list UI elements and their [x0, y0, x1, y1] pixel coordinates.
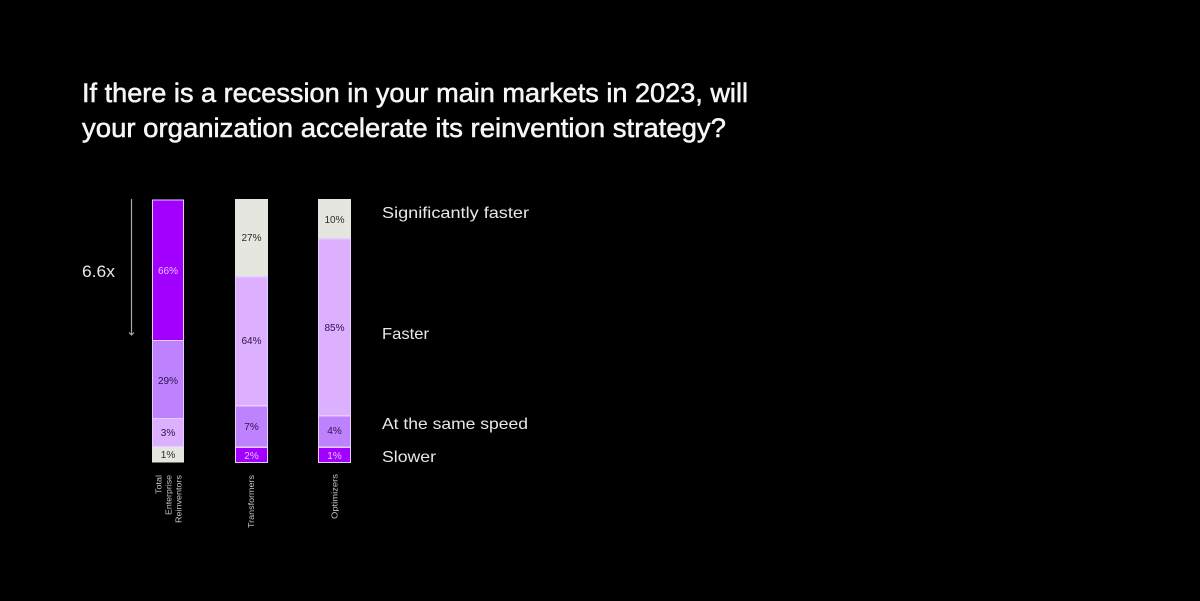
bar: Optimizers: 85% — [324, 323, 345, 334]
column labels: Optimizers — [330, 474, 340, 519]
column labels: Transformers — [246, 475, 256, 528]
bar: Optimizers — [318, 199, 351, 463]
column labels: Reinventors — [174, 475, 184, 523]
arrow: 6.6x difference — [129, 199, 134, 335]
legend labels: Slower — [382, 449, 437, 466]
bar: Total Enterprise Reinventors: 3% — [161, 428, 175, 439]
bar: Total Enterprise Reinventors: 29% — [158, 376, 178, 387]
bar: Optimizers: 4% — [327, 426, 342, 437]
multiplier label: 6.6x — [82, 263, 116, 281]
column labels: Total — [154, 475, 164, 494]
title: If there is a recession in your main markets in 2023, will — [82, 78, 748, 108]
bar: Transformers: 7% — [244, 422, 259, 433]
bar: Transformers: 27% — [241, 233, 262, 244]
title: your organization accelerate its reinvention strategy? — [82, 113, 726, 143]
legend labels: Faster — [382, 326, 430, 343]
bar: Total Enterprise Reinventors: 1% — [161, 450, 175, 461]
bar: Transformers — [235, 199, 268, 463]
legend labels — [382, 205, 530, 466]
title — [82, 78, 748, 143]
legend labels: At the same speed — [382, 416, 528, 433]
bar: Total Enterprise Reinventors: 66% — [158, 266, 178, 277]
column labels — [154, 474, 340, 528]
bar: Transformers: 64% — [241, 336, 262, 347]
legend labels: Significantly faster — [382, 205, 530, 222]
bar: Optimizers: 10% — [324, 215, 345, 226]
column labels: Enterprise — [164, 475, 174, 515]
bar: Total Enterprise Reinventors — [152, 200, 184, 462]
bar: Optimizers: 1% — [327, 451, 342, 462]
bar: Transformers: 2% — [244, 451, 259, 462]
